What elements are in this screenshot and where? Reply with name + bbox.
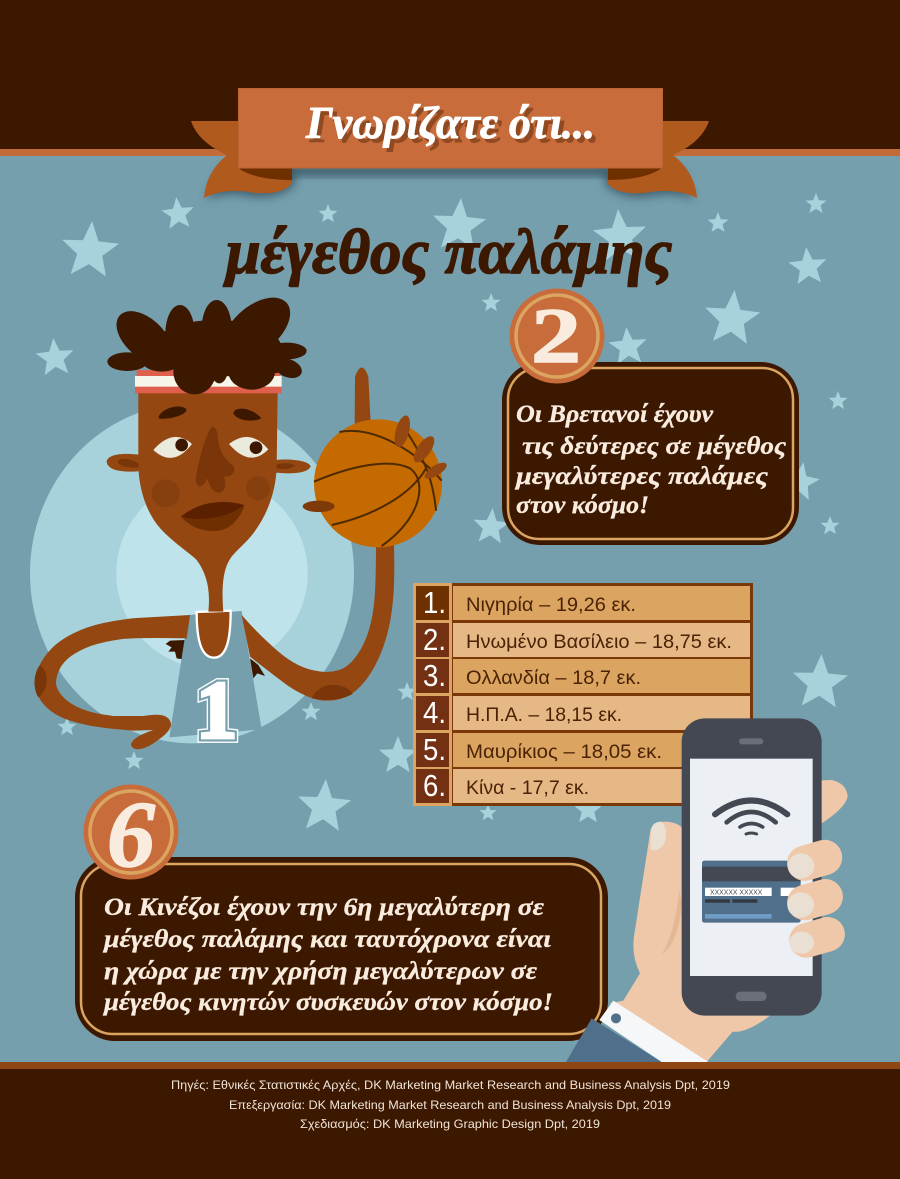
finger nails [787,853,814,954]
hand fingers behind jersey [166,640,265,678]
jersey [169,611,262,737]
pupils [175,439,262,454]
thumb nail [651,822,666,851]
credit card: XXXXXX XXXXX [710,889,763,896]
footer sources [171,1078,730,1131]
mouth [181,505,244,531]
row 2: 2. [423,622,446,657]
nose [197,428,233,492]
left arm [36,615,190,749]
row 4 [416,695,750,730]
panel text: μέγεθος κινητών συσκευών στον κόσμο! [102,989,553,1016]
ribbon banner [191,88,709,200]
footer band background [0,1062,900,1179]
badge 6: 6 [107,783,155,887]
row 2 [416,622,750,657]
panel background [75,857,608,1041]
panel inner outline [81,864,601,1034]
jersey number: 1 [196,665,237,756]
callout panel: Britain [502,288,799,545]
ribbon face [238,88,662,168]
row 5: 5. [423,732,446,767]
row 2: Ηνωμένο Βασίλειο – 18,75 εκ. [466,632,732,653]
panel text [514,401,786,519]
row 1 [416,585,750,620]
row 1: 1. [423,585,446,620]
footer sources: Πηγές: Εθνικές Στατιστικές Αρχές, DK Marketing Market Research and Business Analysis Dpt, 2019 [171,1078,730,1092]
panel text: μεγαλύτερες παλάμες [514,463,768,490]
panel text: στον κόσμο! [516,492,649,519]
row 3: 3. [423,658,446,693]
row 6: 6. [423,768,446,803]
left arm patch [35,665,47,697]
row 6 [416,768,750,803]
headband [135,370,282,393]
ranking table [413,583,753,806]
neck opening [197,611,231,658]
background circle large [30,403,354,743]
phone home button [736,992,767,1001]
row 5 [416,732,750,767]
eyes [153,437,268,458]
character: basketball player [30,286,449,756]
right arm [242,543,394,701]
head and neck [138,392,278,612]
jersey number: 1 [196,665,237,756]
eyebrows [159,407,261,421]
phone speaker [739,738,763,744]
panel text: τις δεύτερες σε μέγεθος [522,433,786,460]
sleeve [566,1018,662,1062]
jersey number: 1 [196,665,237,756]
back finger [817,780,848,827]
background stars [34,193,849,831]
phone screen [690,759,813,976]
hand holding smartphone [566,718,849,1062]
badge 2 [510,288,604,384]
panel text: Οι Βρετανοί έχουν [516,401,714,428]
elbow patch [312,685,353,700]
gripping fingers [783,836,849,962]
row 1: Νιγηρία – 19,26 εκ. [466,595,636,616]
ribbon left tail [191,121,291,198]
row 4: 4. [423,695,446,730]
row 3: Ολλανδία – 18,7 εκ. [466,668,641,689]
top header band [0,0,900,156]
table rows background [452,583,753,806]
cuff [599,1001,708,1062]
ribbon heading: Γνωρίζατε ότι... [305,98,595,148]
index finger [355,367,371,423]
row 5: Μαυρίκιος – 18,05 εκ. [466,742,662,763]
hair [107,286,307,394]
row 3 [416,658,750,693]
footer sources: Επεξεργασία: DK Marketing Market Research and Business Analysis Dpt, 2019 [229,1098,671,1112]
cuff button [611,1013,621,1023]
panel text: η χώρα με την χρήση μεγαλύτερων σε [104,958,538,985]
panel text: Οι Κινέζοι έχουν την 6η μεγαλύτερη σε [104,894,545,921]
badge 2: 2 [531,292,581,379]
basketball seams [314,431,442,546]
footer sources: Σχεδιασμός: DK Marketing Graphic Design Dpt, 2019 [300,1117,600,1131]
basketball [314,419,442,547]
ears [107,454,311,473]
panel background [502,362,799,545]
inner ears [118,459,295,469]
panel text [102,894,553,1016]
row 6: Κίνα - 17,7 εκ. [466,778,589,799]
palm and thumb [610,822,777,1062]
ribbon folds [238,168,662,180]
panel inner outline [508,368,793,539]
credit card [702,861,801,923]
ribbon right tail [608,121,709,198]
callout panel: China [75,783,608,1041]
panel text: μέγεθος παλάμης και ταυτόχρονα είναι [102,926,551,953]
cheeks [152,476,270,507]
ribbon heading: Γνωρίζατε ότι... [309,102,599,152]
row 4: Η.Π.Α. – 18,15 εκ. [466,705,622,726]
ball hand fingers [303,414,449,512]
title: μέγεθος παλάμης [223,216,672,287]
phone body [682,718,822,1016]
palm crease [662,890,682,954]
background circle small [116,478,308,669]
badge 6 [84,783,178,887]
table number column background [413,583,453,806]
wifi icon [715,800,787,834]
